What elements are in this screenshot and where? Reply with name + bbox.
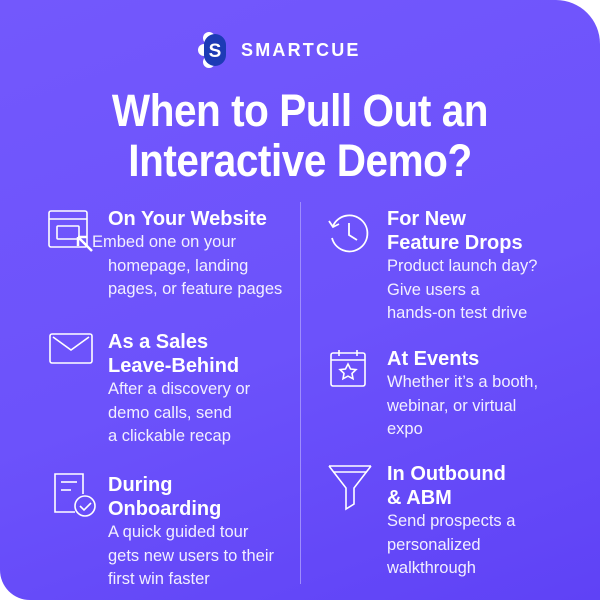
logo: S [209,41,221,62]
item: sales: demo calls, send [108,404,232,422]
item: website: homepage, landing [108,256,248,274]
item: outbound: In Outbound [387,463,506,485]
item: onboarding: first win faster [108,570,210,588]
title: Interactive Demo? [128,135,472,186]
item: feature drops [387,208,537,322]
icon: clock [328,214,368,252]
logo [198,32,361,68]
icon: checklist [54,473,96,517]
item: sales: Leave-Behind [108,355,239,377]
item: feature drops: Feature Drops [387,232,523,254]
divider [300,202,301,584]
item: website [92,208,282,298]
item: website: pages, or feature pages [108,280,282,298]
item: website: On Your Website [108,208,267,230]
item: outbound: personalized [387,536,481,554]
item: outbound: & ABM [387,487,452,509]
item: feature drops: For New [387,208,466,230]
item: outbound: walkthrough [387,559,476,577]
item: feature drops: hands-on test drive [387,304,527,322]
item: feature drops: Product launch day? [387,257,537,275]
item: events: At Events [387,348,479,370]
item: onboarding: A quick guided tour [108,523,248,541]
item: sales: As a Sales [108,331,208,353]
item: outbound: Send prospects a [387,512,515,530]
item: events [387,348,538,438]
icon: envelope [49,333,93,364]
icon: browser [48,210,93,252]
title: When to Pull Out an [112,85,488,136]
item: outbound [387,463,516,577]
item: sales: After a discovery or [108,380,250,398]
item: onboarding: During [108,474,172,496]
title [112,85,488,186]
item: events: webinar, or virtual [387,396,516,414]
item: sales [108,331,250,445]
item: events: expo [387,420,423,438]
item: sales: a clickable recap [108,427,231,445]
item: onboarding [108,474,274,588]
icon: calendar [330,350,366,387]
item: feature drops: Give users a [387,280,480,298]
item: onboarding: Onboarding [108,498,221,520]
icon: funnel [328,465,372,510]
logo: SMARTCUE [241,40,361,60]
item: events: Whether it’s a booth, [387,373,538,391]
item: website: Embed one on your [92,233,236,251]
item: onboarding: gets new users to their [108,546,274,564]
